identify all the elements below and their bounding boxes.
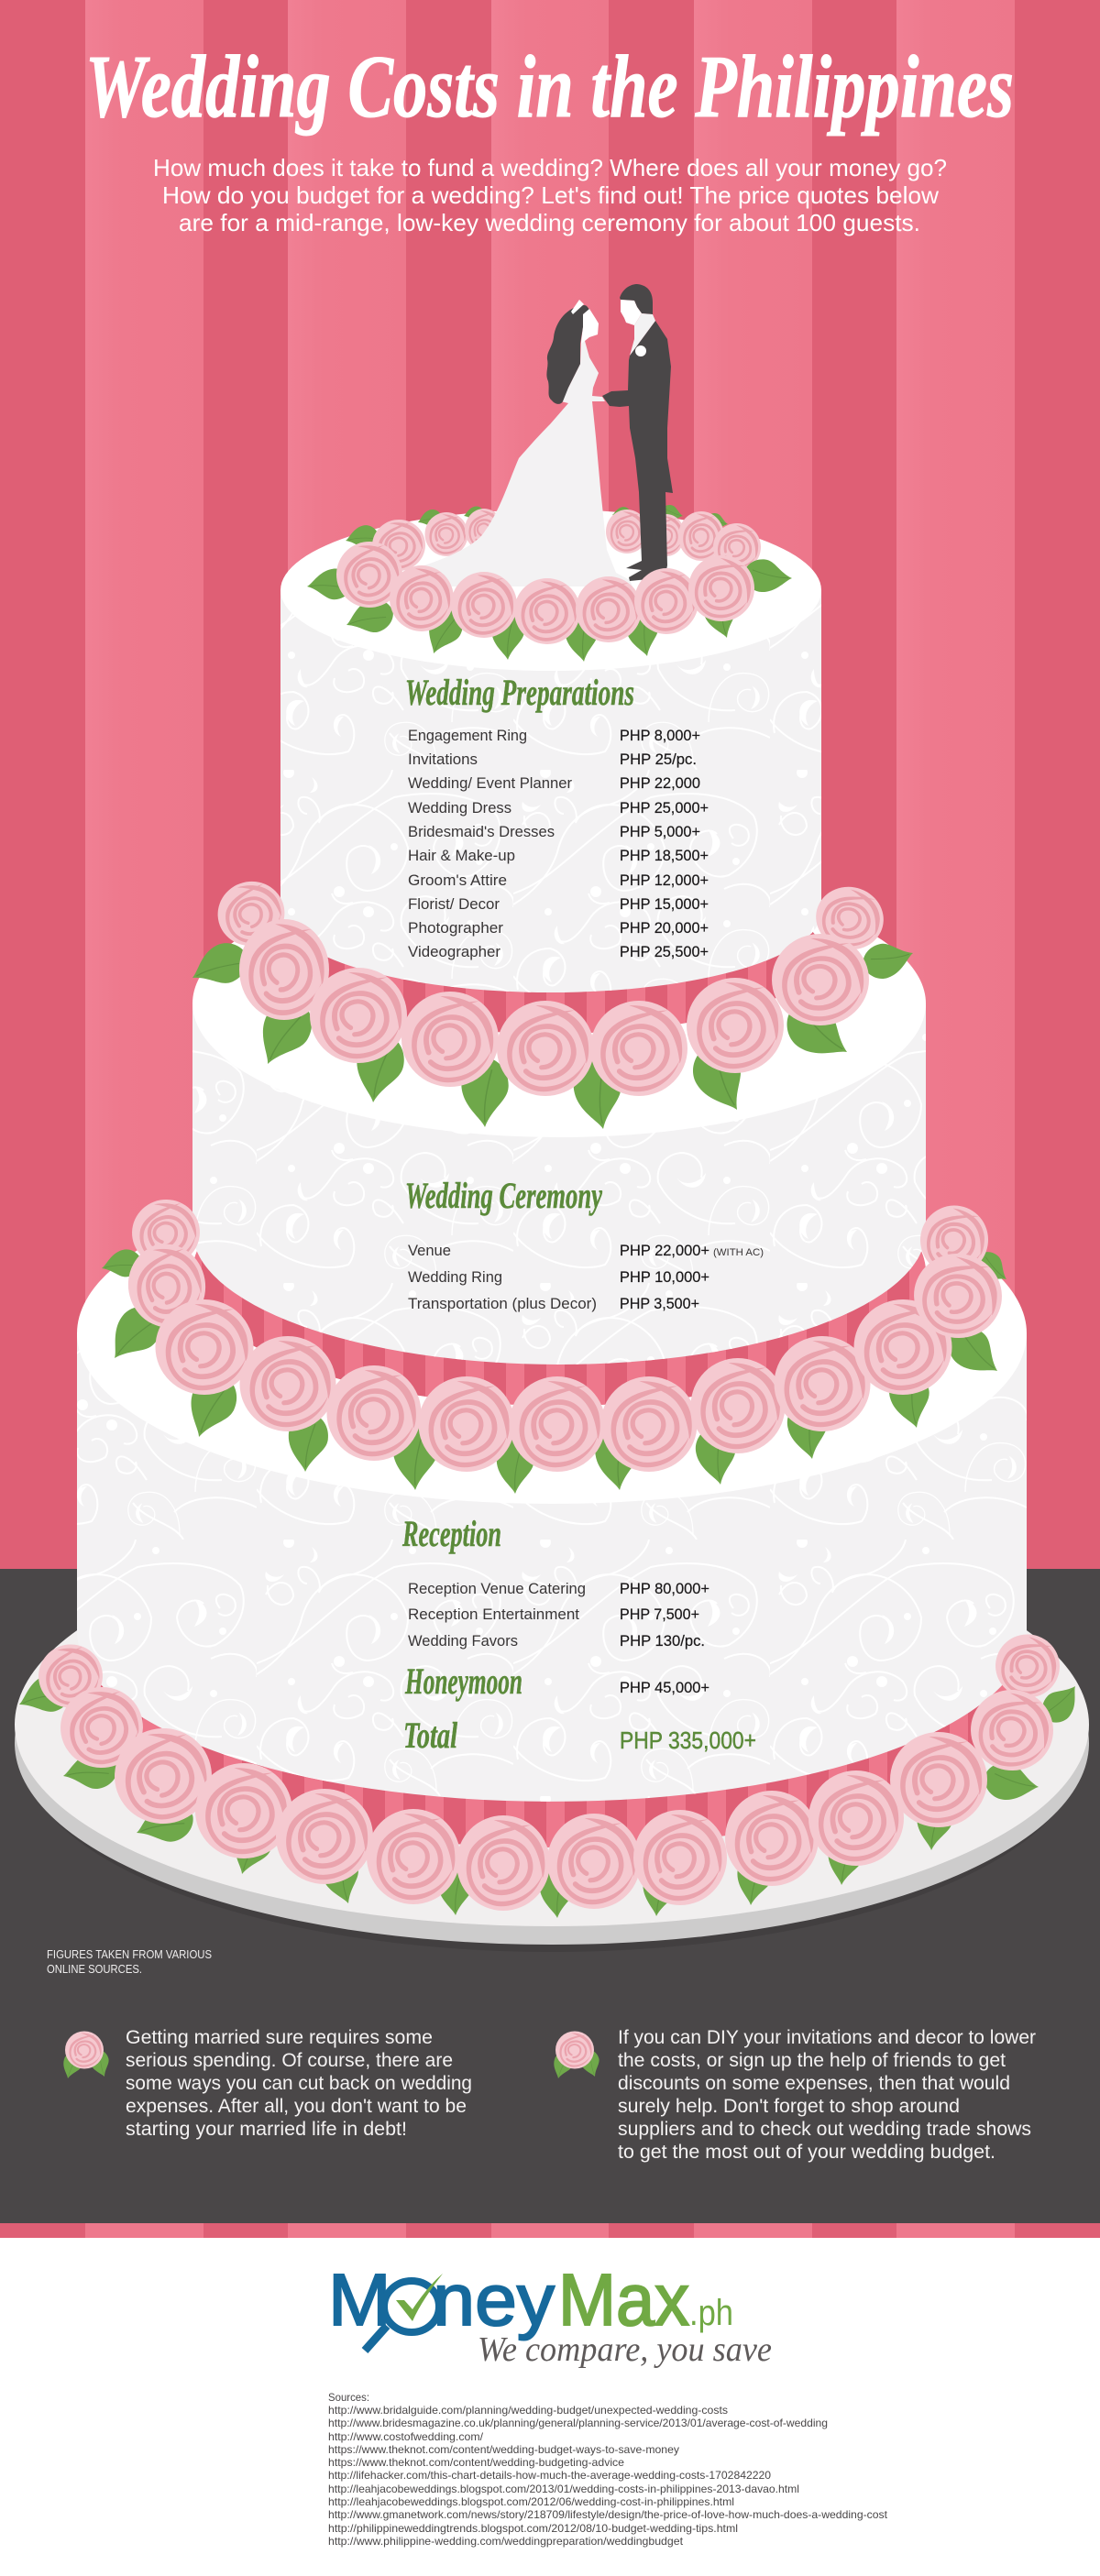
sources list: https://www.theknot.com/content/wedding-budgeting-advice (328, 2456, 624, 2469)
tip: right text: the costs, or sign up the help of friends to get (618, 2050, 1006, 2071)
striped pink background (0, 0, 1100, 1569)
sources list: http://www.philippine-wedding.com/weddingpreparation/weddingbudget (328, 2535, 684, 2548)
row: hair and make-up: PHP 18,500+ (620, 847, 709, 864)
sources list: Sources: (328, 2391, 369, 2404)
logo suffix: .ph (689, 2293, 733, 2333)
sources list: http://www.costofwedding.com/ (328, 2430, 484, 2443)
logo tagline: We compare, you save (478, 2330, 772, 2369)
tip: right text: to get the most out of your wedding budget. (618, 2142, 996, 2163)
intro text: How much does it take to fund a wedding? Where does all your money go? (153, 154, 947, 181)
bottom cake tier top surface (77, 1163, 1027, 1504)
section: reception (402, 1513, 710, 1650)
tip: right text: discounts on some expenses, then that would (618, 2073, 1010, 2094)
bride dress (412, 316, 632, 586)
groom shirt (630, 313, 655, 356)
row: videographer: PHP 25,500+ (620, 943, 709, 960)
icon: rose left (59, 2031, 114, 2081)
boutonniere (635, 345, 646, 356)
row: florist (408, 895, 709, 913)
row: venue catering: Reception Venue Catering (408, 1580, 586, 1597)
tip: left text (126, 2027, 472, 2140)
row: event planner: PHP 22,000 (620, 774, 700, 792)
row: photographer: PHP 20,000+ (620, 919, 709, 937)
top cake tier top surface (280, 510, 821, 671)
intro text (153, 154, 947, 236)
row: venue: Venue (408, 1242, 451, 1259)
bride tiara (571, 300, 584, 314)
row: wedding favors (408, 1632, 705, 1650)
row: transportation (408, 1295, 699, 1312)
logo: MoneyMax.ph (328, 2259, 772, 2369)
groom figure (602, 284, 673, 581)
tip: right text: If you can DIY your invitations and decor to lower (618, 2027, 1036, 2048)
price: total: PHP 335,000+ (620, 1726, 756, 1754)
logo check mark (396, 2274, 443, 2321)
row: wedding favors: Wedding Favors (408, 1632, 518, 1650)
top tier back garland (343, 503, 764, 575)
heading: honeymoon: Honeymoon (404, 1661, 522, 1702)
section: wedding preparations (405, 672, 709, 960)
heading: total: Total (403, 1715, 458, 1756)
row: florist: Florist/ Decor (408, 895, 500, 913)
tip: left text: some ways you can cut back on wedding (126, 2073, 472, 2094)
ribbon under bottom tier (77, 1507, 1027, 1847)
heading: reception: Reception (402, 1513, 501, 1554)
heading: wedding preparations: Wedding Preparations (405, 672, 634, 713)
sources list: https://www.theknot.com/content/wedding-budget-ways-to-save-money (328, 2443, 679, 2456)
row: bridesmaid dresses (408, 823, 700, 840)
row: videographer (408, 943, 709, 960)
sources list: http://philippineweddingtrends.blogspot.com/2012/08/10-budget-wedding-tips.html (328, 2522, 738, 2535)
sources list: http://lifehacker.com/this-chart-details-how-much-the-average-wedding-costs-1702842220 (328, 2469, 771, 2482)
middle cake tier side (192, 1003, 926, 1365)
top cake tier side (280, 590, 821, 992)
logo wordmark green: Max (558, 2259, 689, 2340)
bottom cake tier side (77, 1333, 1027, 1802)
striped footer band (0, 2223, 1100, 2238)
plate garland (13, 1628, 1086, 1919)
row: invitations (408, 751, 697, 768)
tip: left text: Getting married sure requires some (126, 2027, 433, 2048)
row: entertainment (408, 1606, 699, 1623)
top tier front garland (306, 536, 794, 663)
section: wedding ceremony (405, 1175, 764, 1312)
row: engagement ring (408, 727, 700, 744)
row: entertainment: PHP 7,500+ (620, 1606, 699, 1623)
sources list: http://www.bridesmagazine.co.uk/planning/general/planning-service/2013/01/average-cost-of-wedding (328, 2417, 828, 2429)
row: wedding ring: Wedding Ring (408, 1268, 502, 1286)
row: wedding ring (408, 1268, 710, 1286)
bride hair (546, 305, 589, 404)
intro text: are for a mid-range, low-key wedding ceremony for about 100 guests. (179, 209, 920, 236)
row: venue catering: PHP 80,000+ (620, 1580, 710, 1597)
groom hair (620, 284, 653, 314)
bottom tier garland (98, 1194, 1015, 1494)
middle tier garland (184, 874, 918, 1133)
tip: right text: surely help. Don't forget to shop around (618, 2096, 960, 2117)
row: hair and make-up (408, 847, 709, 864)
row: venue (408, 1242, 764, 1259)
row: videographer: Videographer (408, 943, 500, 960)
row: entertainment: Reception Entertainment (408, 1606, 579, 1623)
middle cake tier top surface (192, 870, 926, 1137)
bride face (581, 309, 599, 344)
section: total (403, 1715, 756, 1756)
white footer panel (0, 2238, 1100, 2576)
dark lower background (0, 1569, 1100, 2223)
cake plate (15, 1523, 1089, 1952)
bride figure (412, 300, 632, 586)
row: wedding dress: PHP 25,000+ (620, 799, 709, 817)
row: wedding dress: Wedding Dress (408, 799, 512, 817)
row: groom's attire: PHP 12,000+ (620, 871, 709, 889)
row: wedding dress (408, 799, 709, 817)
icon: rose right (549, 2031, 604, 2081)
sources list: http://leahjacobeweddings.blogspot.com/2013/01/wedding-costs-in-philippines-2013-davao.html (328, 2483, 799, 2495)
sources list: http://leahjacobeweddings.blogspot.com/2012/06/wedding-cost-in-philippines.html (328, 2495, 734, 2508)
row: groom's attire: Groom's Attire (408, 871, 507, 889)
row: wedding ring: PHP 10,000+ (620, 1268, 710, 1286)
row: venue: PHP 22,000+ (620, 1242, 710, 1259)
logo magnifier (365, 2281, 439, 2351)
row: event planner: Wedding/ Event Planner (408, 774, 572, 792)
tip: left text: expenses. After all, you don't want to be (126, 2096, 467, 2117)
row: venue: (WITH AC) (713, 1247, 764, 1258)
sources list: http://www.gmanetwork.com/news/story/218709/lifestyle/design/the-price-of-love-how-much-does-a-wedding-cost (328, 2508, 888, 2521)
heading: wedding ceremony: Wedding Ceremony (405, 1175, 602, 1216)
groom face (621, 300, 642, 325)
row: bridesmaid dresses: PHP 5,000+ (620, 823, 700, 840)
figures note: ONLINE SOURCES. (47, 1962, 142, 1976)
sources list: http://www.bridalguide.com/planning/wedding-budget/unexpected-wedding-costs (328, 2404, 728, 2417)
row: invitations: PHP 25/pc. (620, 751, 697, 768)
ribbon under top tier (280, 872, 822, 1034)
row: engagement ring: PHP 8,000+ (620, 727, 700, 744)
row: engagement ring: Engagement Ring (408, 727, 527, 744)
tip: left text: starting your married life in debt! (126, 2119, 407, 2140)
row: florist: PHP 15,000+ (620, 895, 709, 913)
tip: left text: serious spending. Of course, there are (126, 2050, 453, 2071)
row: venue catering (408, 1580, 710, 1597)
figures note: FIGURES TAKEN FROM VARIOUS (47, 1947, 212, 1961)
price: honeymoon: PHP 45,000+ (620, 1679, 710, 1696)
row: bridesmaid dresses: Bridesmaid's Dresses (408, 823, 555, 840)
sources list (328, 2391, 888, 2548)
row: photographer: Photographer (408, 919, 503, 937)
figures note (47, 1947, 212, 1976)
row: photographer (408, 919, 709, 937)
section: honeymoon (404, 1661, 710, 1702)
logo wordmark blue: Money (328, 2259, 555, 2340)
row: wedding favors: PHP 130/pc. (620, 1632, 705, 1650)
intro text: How do you budget for a wedding? Let's find out! The price quotes below (162, 181, 939, 209)
tip: right text (618, 2027, 1036, 2163)
row: transportation: PHP 3,500+ (620, 1295, 699, 1312)
groom suit (602, 321, 673, 581)
ribbon under middle tier (192, 1138, 926, 1406)
row: transportation: Transportation (plus Decor) (408, 1295, 597, 1312)
row: invitations: Invitations (408, 751, 478, 768)
row: groom's attire (408, 871, 709, 889)
tip: right text: suppliers and to check out wedding trade shows (618, 2119, 1031, 2140)
row: hair and make-up: Hair & Make-up (408, 847, 515, 864)
row: event planner (408, 774, 700, 792)
